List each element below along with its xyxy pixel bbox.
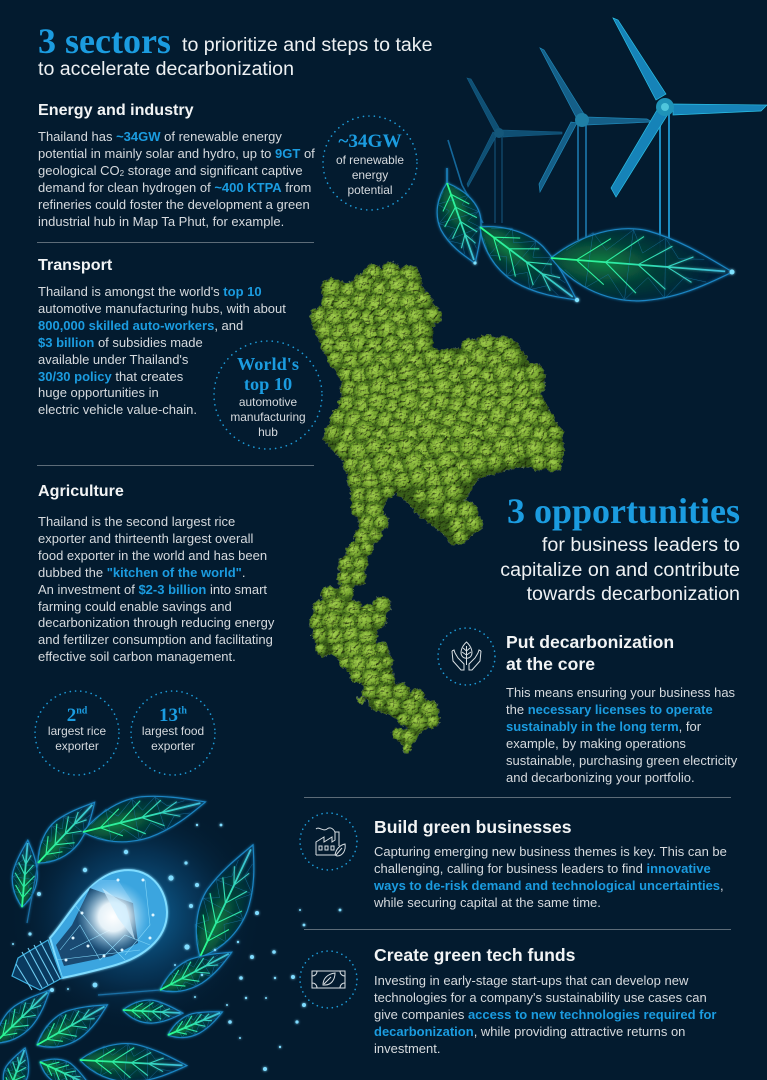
heading: put decarbonization: Put decarbonization xyxy=(506,632,674,652)
text: agriculture: exporter and thirteenth largest overall xyxy=(38,531,253,546)
illustration: Thailand map made of trees xyxy=(309,262,564,753)
panel: transport xyxy=(38,256,286,417)
callout: 2nd largest rice exporter: largest rice xyxy=(48,724,106,738)
heading: build green businesses: Build green businesses xyxy=(374,817,572,837)
heading: transport: Transport xyxy=(38,256,112,274)
text: transport: 30/30 policy that creates xyxy=(38,369,183,384)
heading: put decarbonization xyxy=(506,632,674,674)
text: put decarbonization xyxy=(506,685,738,785)
text: agriculture: effective soil carbon management. xyxy=(38,649,236,664)
callout: 34GW xyxy=(322,115,418,211)
panel: create green tech funds xyxy=(374,945,716,1056)
text: agriculture: decarbonization through reducing energy xyxy=(38,615,274,630)
text: build green businesses: Capturing emerging new business themes is key. This can be xyxy=(374,844,727,859)
text: energy and industry: potential in mainly solar and hydro, up to 9GT of xyxy=(38,146,315,161)
text: energy and industry: geological CO2 storage and significant captive xyxy=(38,163,303,178)
text: transport: automotive manufacturing hubs, with about xyxy=(38,301,286,316)
text: create green tech funds: give companies access to new technologies required for xyxy=(374,1007,716,1022)
illustration: glowing leaves xyxy=(427,168,735,318)
text: agriculture: An investment of $2-3 billion into smart xyxy=(38,582,267,597)
text: transport: electric vehicle value-chain. xyxy=(38,402,197,417)
text: put decarbonization: sustainable, purchasing green electricity xyxy=(506,753,737,768)
callout: world's top 10 xyxy=(213,340,323,450)
text: transport: $3 billion of subsidies made xyxy=(38,335,203,350)
callout: 13th largest food exporter xyxy=(130,690,216,776)
icon: banknote with leaf xyxy=(299,950,358,1009)
illustration: wind turbines xyxy=(448,18,767,263)
text: agriculture: food exporter in the world and has been xyxy=(38,548,267,563)
text: create green tech funds: technologies for a company's sustainability use cases can xyxy=(374,990,707,1005)
callout: world's top 10: manufacturing xyxy=(230,410,306,424)
text: transport xyxy=(38,284,286,417)
callout: 13th largest food exporter: largest food xyxy=(142,724,204,738)
text: build green businesses: while securing capital at the same time. xyxy=(374,895,601,910)
heading: 3 opportunities xyxy=(500,491,740,605)
callout: 13th largest food exporter: exporter xyxy=(151,739,195,753)
callout: 34GW: potential xyxy=(348,183,392,197)
title: 3 sectors xyxy=(38,21,171,61)
heading: 3 opportunities: towards decarbonization xyxy=(527,583,740,605)
callout: world's top 10: hub xyxy=(258,425,278,439)
title: to prioritize and steps to take xyxy=(182,34,432,56)
text: energy and industry: refineries could foster the development a green xyxy=(38,197,310,212)
heading: create green tech funds: Create green tech funds xyxy=(374,945,575,965)
heading: put decarbonization: at the core xyxy=(506,654,595,674)
panel: agriculture xyxy=(38,482,274,664)
text: build green businesses xyxy=(374,844,727,910)
text: put decarbonization: and decarbonizing your portfolio. xyxy=(506,770,695,785)
text: energy and industry: demand for clean hydrogen of ~400 KTPA from xyxy=(38,180,311,195)
text: transport: huge opportunities in xyxy=(38,385,159,400)
title: to accelerate decarbonization xyxy=(38,58,294,80)
heading: energy and industry: Energy and industry xyxy=(38,101,194,119)
text: transport: available under Thailand's xyxy=(38,352,188,367)
callout: 2nd largest rice exporter xyxy=(34,690,120,776)
panel: build green businesses xyxy=(374,817,727,910)
heading: 3 opportunities: for business leaders to xyxy=(542,534,740,556)
callout: world's top 10: top 10 xyxy=(244,374,292,394)
text: put decarbonization: This means ensuring your business has xyxy=(506,685,735,700)
heading: agriculture: Agriculture xyxy=(38,482,124,500)
text: energy and industry xyxy=(38,129,315,229)
text: put decarbonization: the necessary licenses to operate xyxy=(506,702,713,717)
callout: 2nd largest rice exporter: 2nd xyxy=(67,705,87,726)
title xyxy=(38,21,432,80)
illustration: light bulb and leaves xyxy=(0,782,341,1080)
text: create green tech funds xyxy=(374,973,716,1056)
text: agriculture: dubbed the "kitchen of the world". xyxy=(38,565,245,580)
heading: 3 opportunities: capitalize on and contribute xyxy=(500,558,740,580)
text: create green tech funds: decarbonization, while providing attractive returns on xyxy=(374,1024,685,1039)
text: energy and industry: industrial hub in Map Ta Phut, for example. xyxy=(38,214,284,229)
text: create green tech funds: investment. xyxy=(374,1041,440,1056)
text: build green businesses: ways to de-risk demand and technological uncertainties, xyxy=(374,878,724,893)
panel: put decarbonization at the core xyxy=(506,632,738,785)
callout: world's top 10: automotive xyxy=(239,395,297,409)
callout: 2nd largest rice exporter: exporter xyxy=(55,739,99,753)
callout: 34GW: of renewable xyxy=(336,153,404,167)
callout: 34GW: energy xyxy=(352,168,388,182)
text: create green tech funds: Investing in early-stage start-ups that can develop new xyxy=(374,973,688,988)
text: transport: Thailand is amongst the world's top 10 xyxy=(38,284,262,299)
text: agriculture: and fertilizer consumption and facilitating xyxy=(38,632,273,647)
text: transport: 800,000 skilled auto-workers, and xyxy=(38,318,243,333)
heading: 3 opportunities: 3 opportunities xyxy=(507,491,740,531)
text: put decarbonization: sustainably in the long term, for xyxy=(506,719,701,734)
icon: hands holding leaf xyxy=(437,627,496,686)
panel: energy and industry xyxy=(38,101,315,229)
text: put decarbonization: example, by making operations xyxy=(506,736,686,751)
callout: 13th largest food exporter: 13th xyxy=(159,705,187,726)
text: build green businesses: challenging, calling for business leaders to find innovative xyxy=(374,861,711,876)
callout: world's top 10: World's xyxy=(237,354,299,374)
text: agriculture: farming could enable savings and xyxy=(38,599,232,614)
callout: 34GW: ~34GW xyxy=(338,131,402,152)
text: agriculture: Thailand is the second largest rice xyxy=(38,514,235,529)
icon: factory with leaf xyxy=(299,812,358,871)
text: energy and industry: Thailand has ~34GW of renewable energy xyxy=(38,129,282,144)
text: agriculture xyxy=(38,514,274,664)
